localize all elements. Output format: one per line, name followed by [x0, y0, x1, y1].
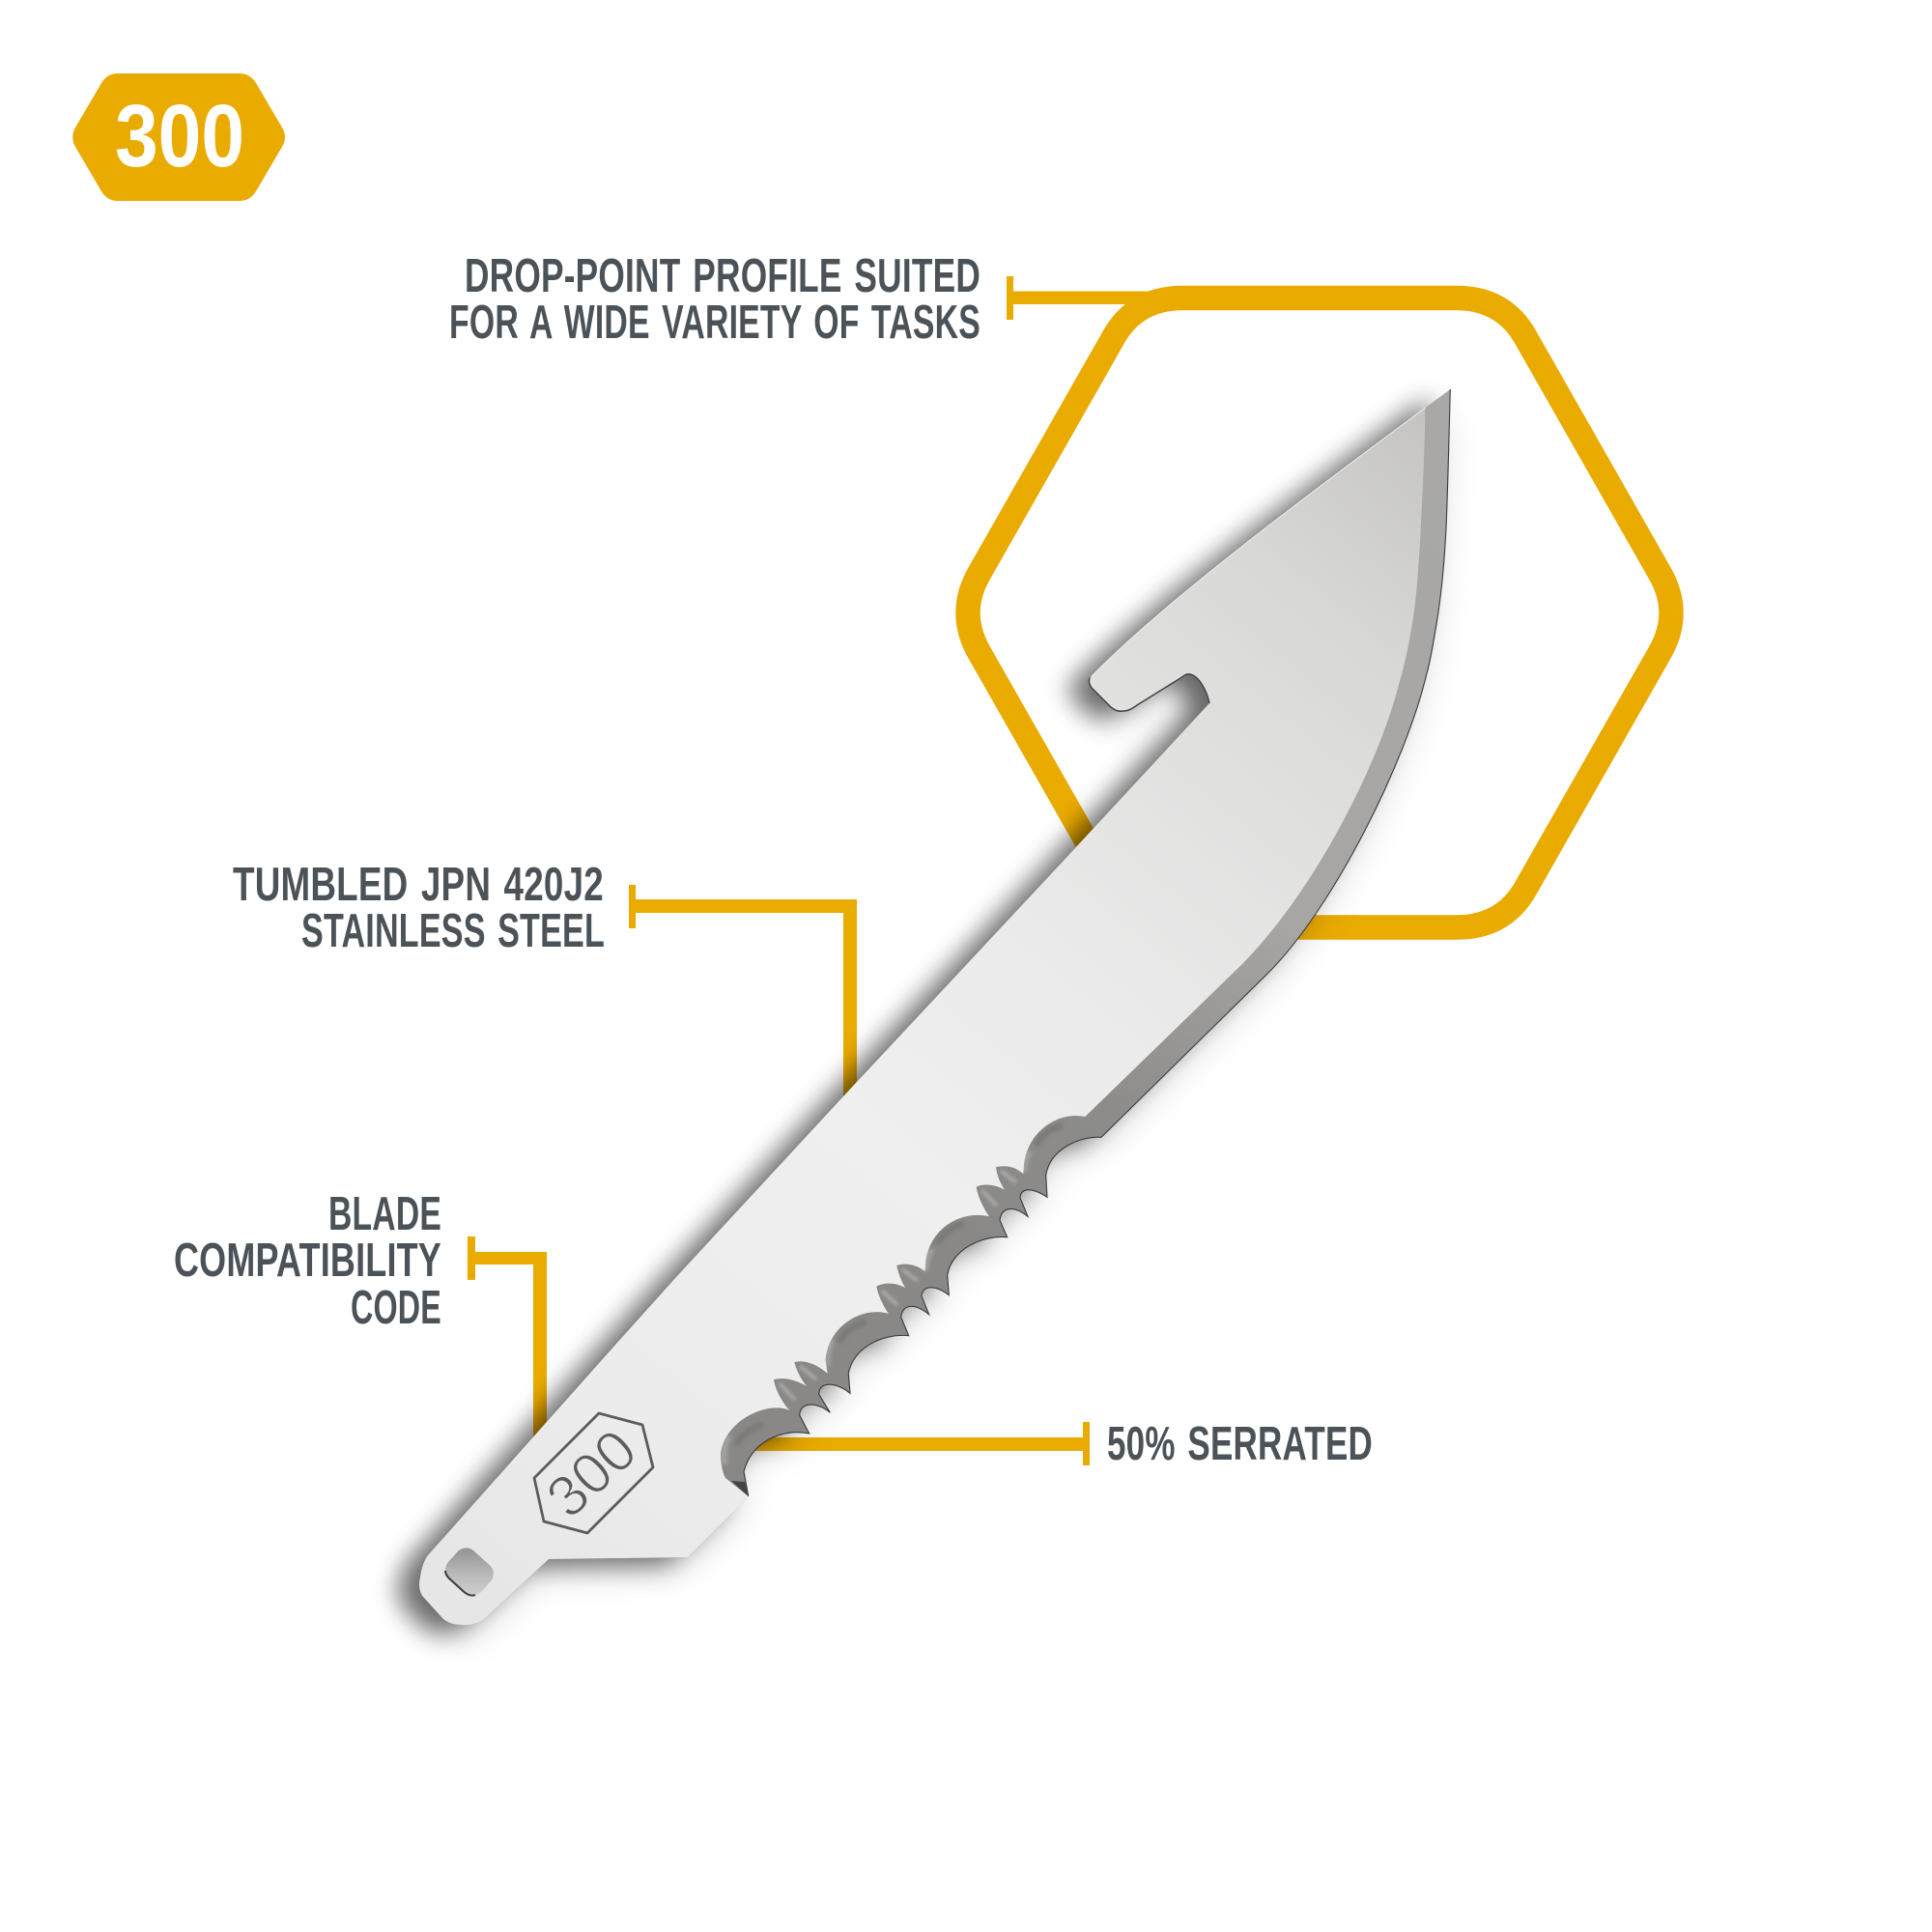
callout: tumbled steel — [233, 858, 857, 1102]
callout: drop-point profile: FOR A WIDE VARIETY OF TASKS — [449, 296, 980, 349]
edge line — [744, 389, 1450, 1496]
tang hole — [440, 1543, 498, 1601]
blade — [419, 389, 1450, 1625]
callout: tumbled steel: TUMBLED JPN 420J2 — [233, 858, 604, 911]
engraved code: 300 hexagon: 300 — [534, 1417, 649, 1530]
serration shading — [724, 1125, 1063, 1464]
callout: blade compatibility code: COMPATIBILITY — [174, 1234, 441, 1287]
badge: 300 hexagon — [72, 73, 285, 201]
callout: drop-point profile — [449, 249, 1154, 349]
callout: drop-point profile: DROP-POINT PROFILE SUITED — [465, 249, 980, 302]
blade flat face — [419, 408, 1425, 1625]
hook edge line — [1089, 674, 1209, 711]
callout: 50% serrated — [744, 1417, 1373, 1470]
blade shadow — [398, 397, 1446, 1638]
callout: blade compatibility code — [174, 1187, 547, 1449]
blade bevel and serrated edge silhouette — [419, 389, 1450, 1625]
spine highlight — [1092, 408, 1425, 676]
callout: tumbled steel: STAINLESS STEEL — [301, 904, 605, 957]
badge: 300 hexagon: 300 — [115, 87, 244, 185]
large hexagon outline — [968, 298, 1671, 927]
callout: 50% serrated: 50% SERRATED — [1107, 1417, 1373, 1470]
callout: blade compatibility code: CODE — [351, 1281, 441, 1334]
callout: blade compatibility code: BLADE — [328, 1187, 441, 1240]
dark serration tip — [731, 1481, 749, 1496]
